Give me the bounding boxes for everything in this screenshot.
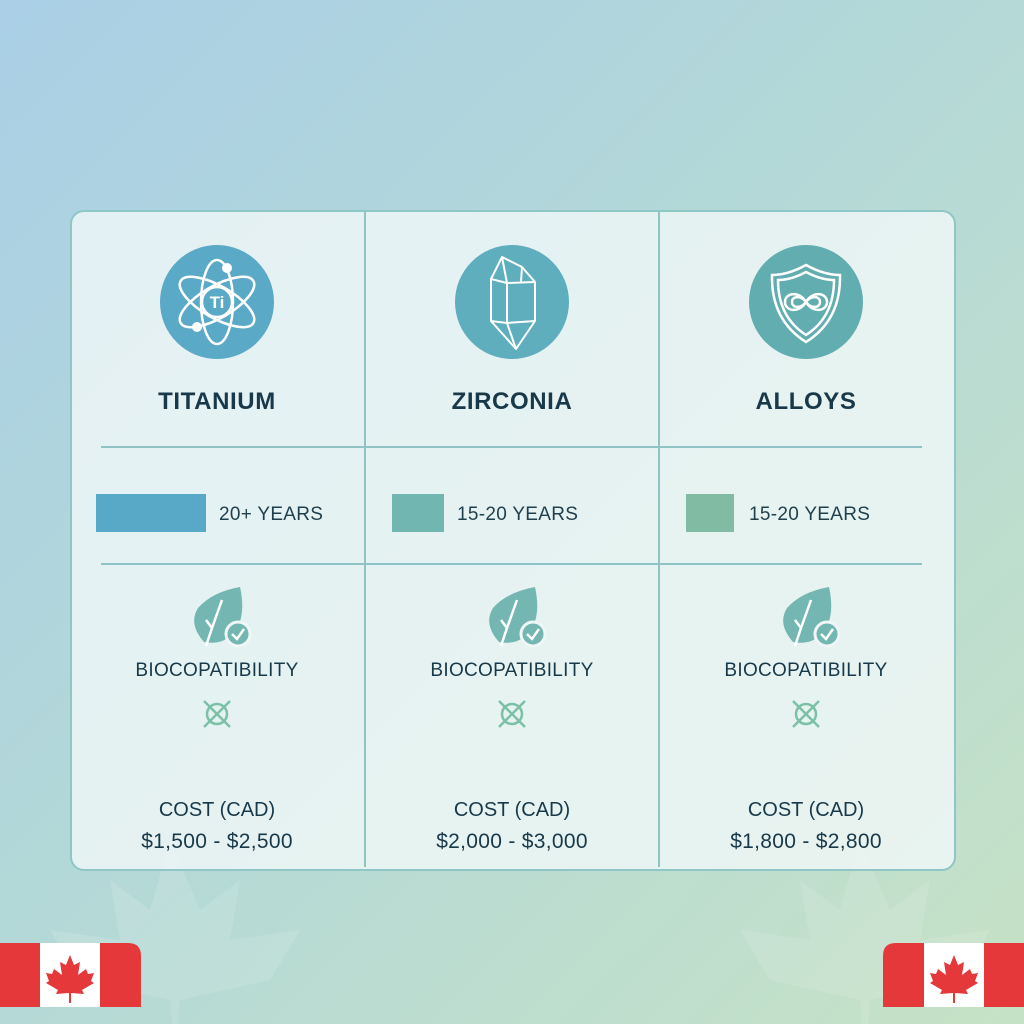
panel: comparison table: [70, 210, 956, 871]
text: BIOCOPATIBILITY: [724, 660, 888, 681]
bar: alloys lifespan: [686, 494, 734, 532]
heading: alloys: ALLOYS: [756, 388, 856, 415]
icon: flag left: [0, 943, 141, 1007]
bar: zirconia lifespan: [392, 494, 444, 532]
icon: shield: [749, 245, 863, 359]
text: 20+ YEARS: [219, 504, 323, 525]
text: COST (CAD): [748, 799, 864, 821]
icon: crystal: [455, 245, 569, 359]
heading: zirconia: ZIRCONIA: [452, 388, 572, 415]
decorative maple leaves: [51, 871, 196, 956]
text: $2,000 - $3,000: [436, 830, 588, 853]
text: COST (CAD): [454, 799, 570, 821]
icon: flag right: [883, 943, 1024, 1007]
text: biocompatibility: BIOCOPATIBILITY: [135, 660, 299, 681]
text: 15-20 YEARS: [749, 504, 870, 525]
heading: titanium: TITANIUM: [158, 388, 276, 415]
text: 15-20 YEARS: [457, 504, 578, 525]
icon: titanium atom: [160, 245, 274, 359]
text: $1,800 - $2,800: [730, 830, 882, 853]
bar: titanium lifespan: [96, 494, 206, 532]
icon: titanium atom: Ti: [210, 293, 224, 312]
text: $1,500 - $2,500: [141, 830, 293, 853]
text: costs: COST (CAD): [159, 799, 275, 821]
icons: leaf + x: [194, 587, 838, 728]
text: BIOCOPATIBILITY: [430, 660, 594, 681]
